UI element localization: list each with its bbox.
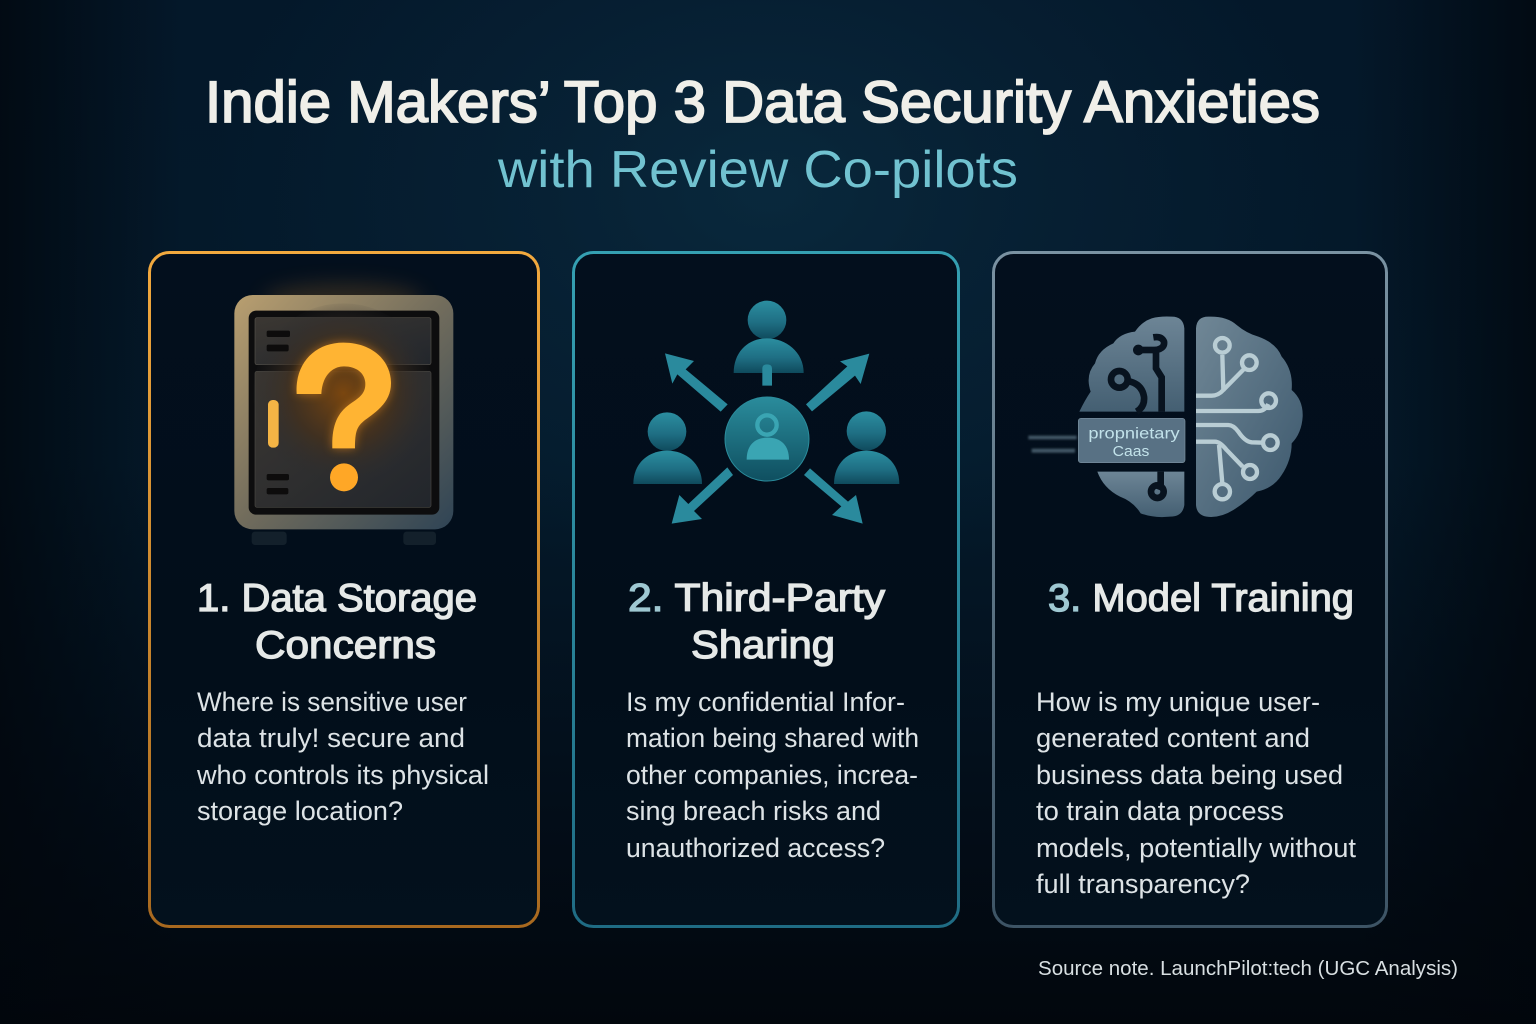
heading: third-party sharing: Sharing <box>691 624 835 667</box>
card border: teal <box>574 252 958 926</box>
icon: circuit brain: propnietary <box>1088 425 1180 442</box>
panel: third-party sharing <box>574 252 958 926</box>
panel: data storage concerns <box>150 252 538 926</box>
heading: data storage concerns <box>197 577 477 667</box>
body text: data storage: storage location? <box>197 796 403 826</box>
card border: slate <box>994 252 1386 926</box>
icon: circuit brain <box>1028 317 1303 517</box>
title <box>205 70 1320 199</box>
body text: third-party sharing: sing breach risks and <box>626 796 881 826</box>
heading: data storage concerns: 1. Data Storage <box>197 577 477 620</box>
body text: data storage <box>196 687 489 826</box>
icon: circuit brain: Caas <box>1113 444 1149 460</box>
source note: Source note. LaunchPilot:tech (UGC Analysis) <box>1038 958 1458 980</box>
body text: third-party sharing: unauthorized access? <box>626 833 885 863</box>
icon: people network with arrows <box>633 301 899 524</box>
body text: model training: full transparency? <box>1036 869 1250 899</box>
body text: model training: generated content and <box>1036 723 1310 753</box>
body text: model training: How is my unique user- <box>1036 687 1320 717</box>
body text: data storage: who controls its physical <box>196 760 489 790</box>
title: Indie Makers’ Top 3 Data Security Anxieties <box>205 70 1320 135</box>
body text: model training: business data being used <box>1036 760 1343 790</box>
body text: model training <box>1036 687 1357 899</box>
title: with Review Co-pilots <box>497 141 1018 199</box>
body text: model training: to train data process <box>1036 796 1284 826</box>
body text: third-party sharing: other companies, increa- <box>626 760 918 790</box>
icon: safe with question mark <box>234 283 453 545</box>
heading: model training: 3. Model Training <box>1048 577 1354 620</box>
body text: model training: models, potentially without <box>1036 833 1357 863</box>
heading: data storage concerns: Concerns <box>255 624 436 667</box>
body text: third-party sharing: mation being shared with <box>626 723 919 753</box>
body text: third-party sharing: Is my confidential Infor- <box>626 687 905 717</box>
heading: third-party sharing <box>628 577 886 667</box>
card border: amber <box>150 252 538 926</box>
panel: model training <box>994 252 1386 926</box>
body text: data storage: Where is sensitive user <box>197 687 467 717</box>
heading: third-party sharing: 2. Third-Party <box>628 577 886 620</box>
body text: data storage: data truly! secure and <box>197 723 465 753</box>
body text: third-party sharing <box>626 687 919 863</box>
